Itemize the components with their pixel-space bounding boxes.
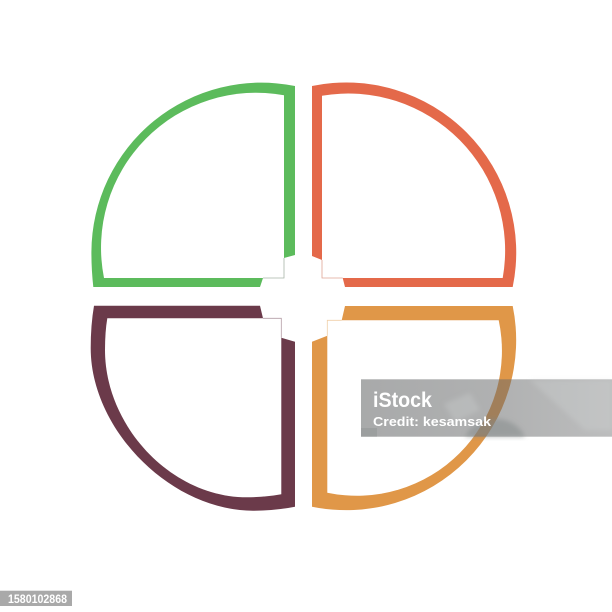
segment: maroon bottom-left <box>91 306 295 511</box>
segment: green top-left <box>91 83 295 287</box>
watermark logo text: iStock <box>373 389 432 412</box>
segment: orange bottom-right <box>312 306 516 510</box>
image id tag: 1580102868 <box>8 594 68 606</box>
watermark banner <box>361 379 612 437</box>
segment: coral top-right <box>312 83 516 287</box>
watermark credit text: Credit: kesamsak <box>373 414 492 429</box>
image id tag <box>0 591 72 606</box>
